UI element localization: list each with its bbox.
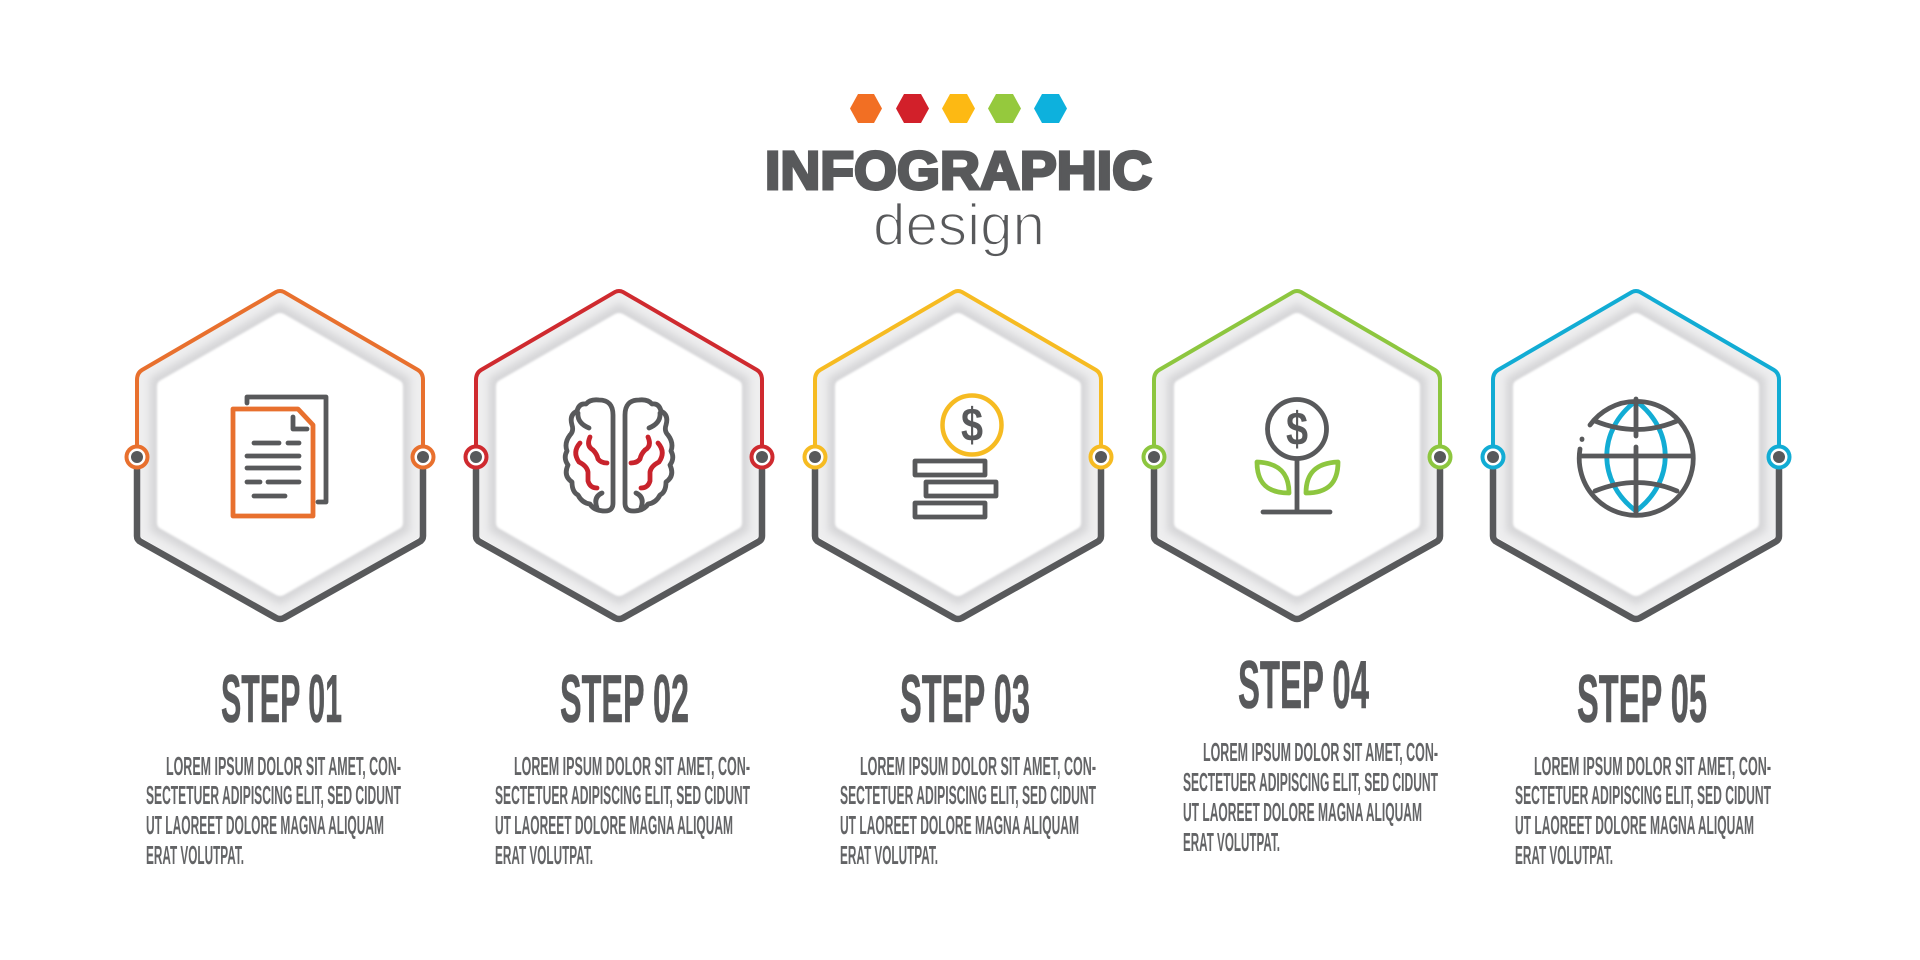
panel: step 04: STEP 04 [1238,647,1369,723]
panel: step 04 [1144,290,1450,857]
panel: step 01: LOREM IPSUM DOLOR SIT AMET, CON- [166,751,401,781]
text: SECTETUER ADIPISCING ELIT, SED CIDUNT [840,780,1096,810]
panel: step 02: UT LAOREET DOLORE MAGNA ALIQUAM [495,810,733,840]
panel: step 05: STEP 05 [1577,661,1707,737]
hexagon frame 02 [466,290,772,620]
title: INFOGRAPHIC [765,141,1152,201]
header [765,94,1152,258]
hexagon frame 05 [1482,290,1790,620]
icon: coins: $ [961,398,983,451]
text block 02: ERAT VOLUTPAT. [495,840,593,870]
subtitle: design [873,193,1045,258]
panel: step 03: LOREM IPSUM DOLOR SIT AMET, CON- [860,751,1096,781]
icon: documents [233,397,326,516]
panel: step 01 [126,290,434,870]
text block 01 [146,751,401,870]
text block 04 [1183,737,1438,857]
panel: step 02 [466,290,772,870]
panel: step 01: SECTETUER ADIPISCING ELIT, SED CIDUNT [146,780,401,810]
panel: step 01: STEP 01 [221,661,342,737]
panel: step 05 [1482,290,1790,870]
text block 03: ERAT VOLUTPAT. [840,840,938,870]
hexagon frame 01 [126,290,434,620]
panel: step 02: SECTETUER ADIPISCING ELIT, SED CIDUNT [495,780,750,810]
icon: money plant [1257,400,1338,512]
panel: step 03: STEP 03 [900,661,1030,737]
hexagon frame 04 [1144,290,1450,620]
panel: step 04: LOREM IPSUM DOLOR SIT AMET, CON- [1203,737,1438,767]
text: SECTETUER ADIPISCING ELIT, SED CIDUNT [1183,767,1438,797]
text block 01: ERAT VOLUTPAT. [146,840,244,870]
icon: brain [565,400,673,511]
panel: step 03 [804,290,1112,870]
icon: coins [915,396,1002,517]
icon: money plant: $ [1286,402,1308,455]
icon: globe [1579,399,1693,515]
text block 05: ERAT VOLUTPAT. [1515,840,1613,870]
colour hexagon row [850,94,1067,123]
panel: step 03: UT LAOREET DOLORE MAGNA ALIQUAM [840,810,1079,840]
hexagon frame 03 [804,290,1112,620]
text block 03 [840,751,1096,870]
panel: step 04: UT LAOREET DOLORE MAGNA ALIQUAM [1183,797,1422,827]
text block 04: ERAT VOLUTPAT. [1183,827,1280,857]
panel: step 01: UT LAOREET DOLORE MAGNA ALIQUAM [146,810,384,840]
text block 02 [495,751,750,870]
panel: step 02: STEP 02 [560,661,689,737]
text block 05 [1515,751,1771,870]
panel: step 02: LOREM IPSUM DOLOR SIT AMET, CON- [514,751,750,781]
